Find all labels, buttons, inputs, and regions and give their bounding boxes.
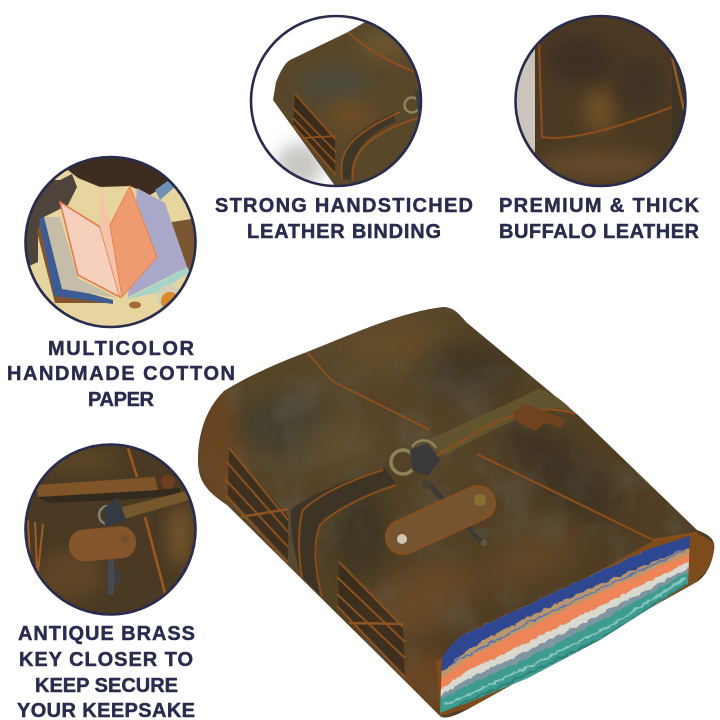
leather mottling xyxy=(190,300,720,720)
heading: strong handstiched leather binding: STRONG HANDSTICHED xyxy=(215,195,473,217)
brass key xyxy=(391,440,492,546)
page edges: multicolor paper xyxy=(440,536,690,713)
circle: antique brass key xyxy=(24,443,198,617)
stitching: upper binding xyxy=(225,448,288,563)
ring xyxy=(516,16,686,186)
circle: buffalo leather detail xyxy=(514,15,690,187)
leather tab with rivets xyxy=(397,494,486,544)
flap edge lines xyxy=(307,352,697,540)
heading: strong handstiched leather binding: LEATHER BINDING xyxy=(247,221,441,243)
photo: leather journal with key xyxy=(190,300,720,720)
heading: antique brass key closer: KEY CLOSER TO xyxy=(19,649,193,671)
wrap strap xyxy=(291,389,577,597)
stitching: lower binding xyxy=(337,562,406,678)
heading: strong handstiched leather binding xyxy=(215,195,473,243)
heading: multicolor handmade cotton paper xyxy=(7,338,235,411)
book cover xyxy=(198,307,714,718)
heading: multicolor handmade cotton paper: PAPER xyxy=(88,389,155,411)
heading: antique brass key closer xyxy=(17,623,195,720)
circle: leather binding detail xyxy=(250,15,425,190)
strap end buckle xyxy=(513,404,566,431)
ring xyxy=(26,157,196,327)
heading: multicolor handmade cotton paper: MULTICOLOR xyxy=(48,338,195,360)
heading: premium & thick buffalo leather xyxy=(499,195,700,243)
ring xyxy=(251,16,421,186)
heading: premium & thick buffalo leather: PREMIUM & THICK xyxy=(499,195,700,217)
heading: antique brass key closer: KEEP SECURE xyxy=(35,675,178,697)
heading: multicolor handmade cotton paper: HANDMADE COTTON xyxy=(7,363,235,385)
heading: premium & thick buffalo leather: BUFFALO LEATHER xyxy=(499,221,700,243)
ring xyxy=(26,444,196,614)
circle: handmade cotton paper xyxy=(20,156,198,330)
heading: antique brass key closer: ANTIQUE BRASS xyxy=(18,623,195,645)
